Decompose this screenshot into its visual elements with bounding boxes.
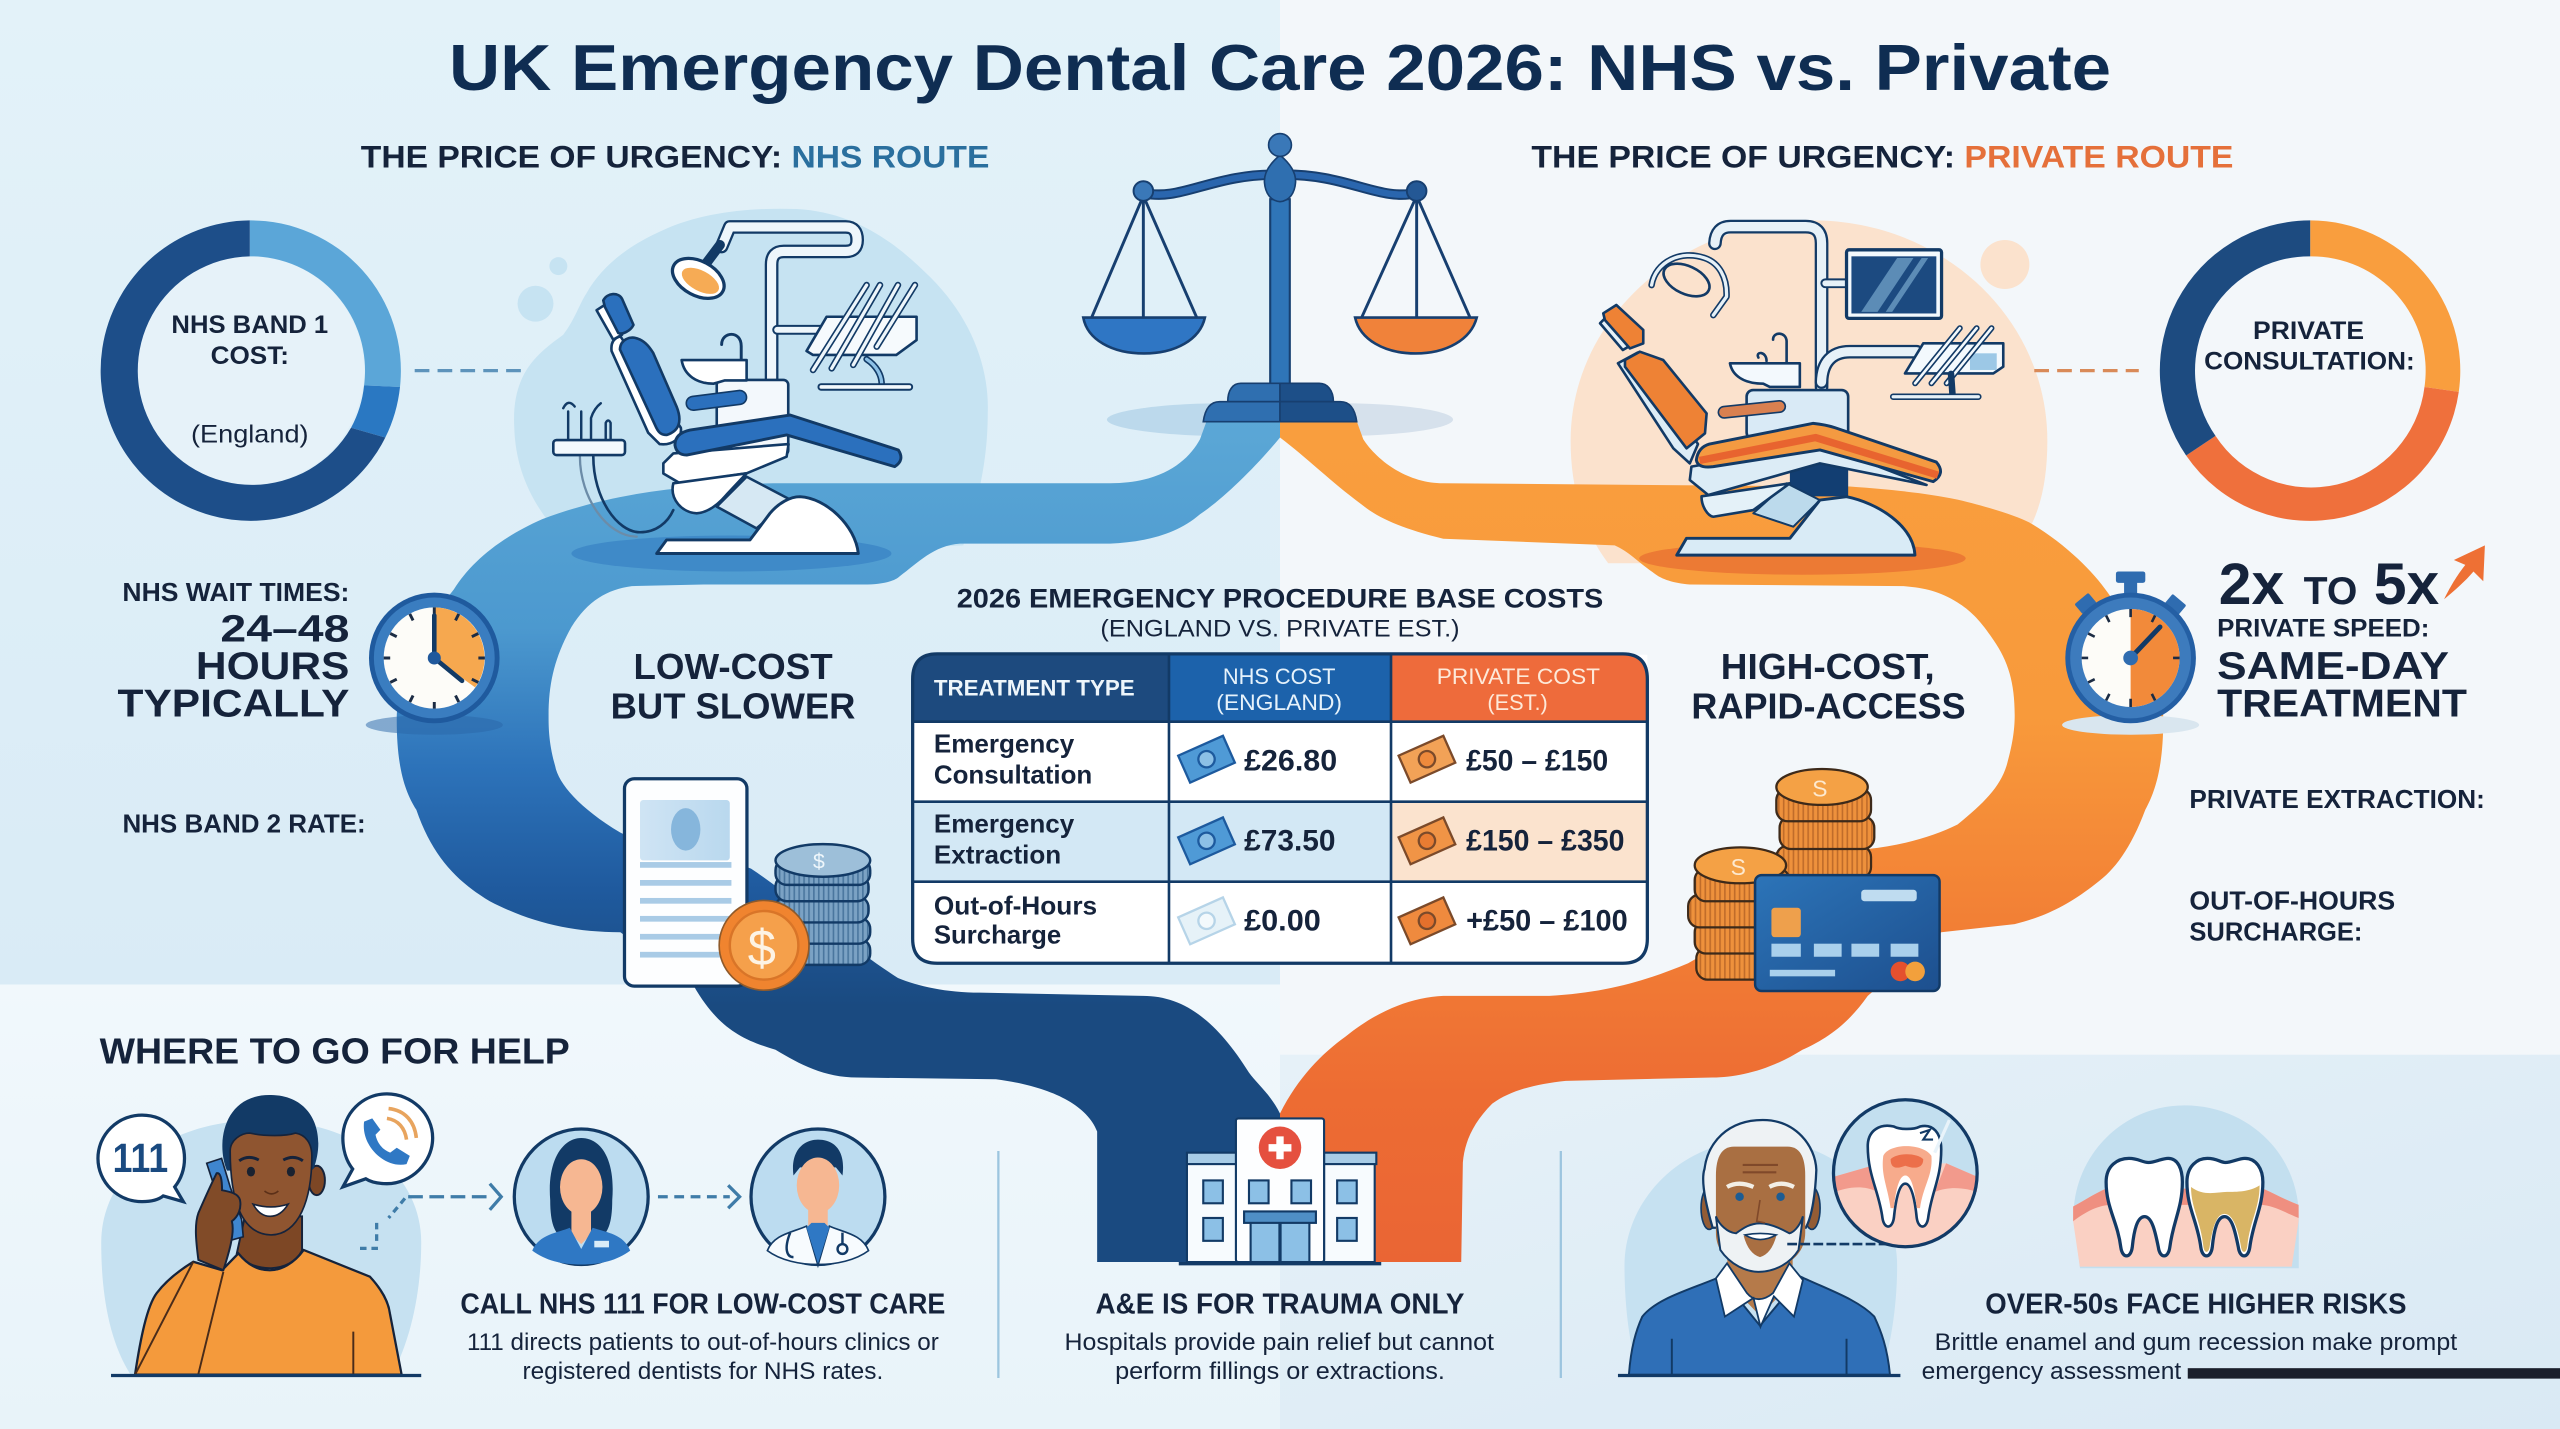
- illustration: older man: [1618, 1120, 1900, 1376]
- private route summary: RAPID-ACCESS: [1691, 685, 1966, 726]
- private extraction label: PRIVATE EXTRACTION:: [2189, 784, 2485, 814]
- pedestal: [1753, 483, 1820, 527]
- beam: [1143, 175, 1417, 195]
- eyes, brows, nose and smile: [239, 1157, 303, 1216]
- header text: TREATMENT TYPE: [934, 676, 1135, 701]
- table heading: [957, 583, 1603, 643]
- hand: [196, 1173, 240, 1270]
- NHS wait unit: HOURS: [196, 645, 349, 688]
- callout: over-50s higher risks: emergency assessment: [1922, 1358, 2181, 1385]
- pillar: [1270, 199, 1290, 384]
- donut: NHS band 1 cost: [101, 220, 401, 521]
- NHS route summary: [611, 646, 856, 726]
- tray: [807, 317, 917, 355]
- base upper step: [1228, 383, 1280, 402]
- arrow: caller to nurse: [360, 1184, 501, 1248]
- icon: hospital: [1179, 1118, 1381, 1264]
- circle outline: [1833, 1100, 1977, 1247]
- callout: A&E for trauma only: A&E IS FOR TRAUMA ONLY: [1096, 1288, 1464, 1320]
- NHS route ribbon: [397, 421, 1280, 1262]
- cost table: Surcharge: [934, 920, 1061, 950]
- icon: treatment document with coins: $: [748, 919, 776, 976]
- NHS route summary: BUT SLOWER: [611, 685, 856, 726]
- under-seat column: [1790, 449, 1848, 496]
- instruments: [1915, 328, 1992, 383]
- icon: coins and credit card: S: [1731, 854, 1746, 880]
- collar: [1716, 1263, 1803, 1327]
- private route summary: [1691, 646, 1966, 726]
- NHS wait value: 24–48: [220, 608, 349, 650]
- donut: private consultation: [2160, 220, 2460, 521]
- base line: [111, 1375, 421, 1377]
- seat body upper: [1690, 444, 1927, 495]
- armrest: [1724, 407, 1780, 412]
- coin stack: [776, 844, 870, 965]
- base line: [1618, 1375, 1900, 1377]
- headrest shell: [1600, 317, 1629, 350]
- hub: [1264, 155, 1296, 202]
- headrest: [1603, 305, 1643, 348]
- tray arm: [1822, 352, 1917, 382]
- speed multiplier: TO: [2304, 570, 2357, 613]
- NHS band 2 label: NHS BAND 2 RATE:: [122, 809, 366, 839]
- icon: speed arrow: [2444, 545, 2485, 599]
- cost table: NHS COST: [1223, 664, 1336, 689]
- monitor stem: [1825, 280, 1847, 286]
- callout: call NHS 111: 111 directs patients to out-of-hours clinics or: [467, 1329, 939, 1356]
- headrest: [603, 294, 633, 333]
- donut label line 2: COST:: [211, 342, 289, 370]
- cost table: (EST.): [1487, 690, 1548, 715]
- seat: [675, 415, 901, 467]
- out-of-hours label: OUT-OF-HOURS: [2189, 885, 2395, 915]
- pulp: [1883, 1146, 1932, 1208]
- cost table: (ENGLAND): [1216, 690, 1342, 715]
- left tooth: [2106, 1158, 2182, 1256]
- NHS money icons: [1178, 736, 1235, 944]
- NHS prices: £26.80: [1244, 745, 1337, 778]
- lamp arm: [1715, 227, 1822, 387]
- credit card: [1755, 875, 1940, 991]
- speed multiplier: 2x: [2219, 552, 2284, 617]
- document: [624, 779, 747, 986]
- speed multiplier: 5x: [2374, 552, 2440, 617]
- icon: private stopwatch: [2062, 571, 2199, 735]
- neck: [237, 1216, 302, 1268]
- lamp: [1658, 257, 1715, 303]
- dashed pointer to tooth: [1787, 1243, 1887, 1245]
- tooth: [1868, 1126, 1941, 1227]
- icon: NHS wait clock: [366, 593, 503, 735]
- crack: [1920, 1130, 1933, 1140]
- callout: call NHS 111: [460, 1288, 945, 1385]
- callout: over-50s higher risks: OVER-50s FACE HIGHER RISKS: [1985, 1288, 2407, 1320]
- front coin stack: [1688, 847, 1791, 980]
- icon: NHS dental chair: [553, 227, 917, 571]
- icon: coins and credit card: [1688, 769, 1940, 991]
- callout: A&E for trauma only: [1064, 1288, 1494, 1385]
- private speed value: SAME-DAY: [2217, 645, 2449, 688]
- blue pan: [1083, 318, 1205, 353]
- icon: doctor: [751, 1129, 885, 1265]
- hand tools: [563, 403, 611, 439]
- base: [1677, 497, 1915, 555]
- base: [657, 497, 858, 553]
- icon: treatment document with coins: $: [813, 851, 825, 874]
- NHS wait qualifier: TYPICALLY: [118, 683, 349, 726]
- callout: call NHS 111: CALL NHS 111 FOR LOW-COST CARE: [460, 1288, 945, 1320]
- face: [1716, 1147, 1805, 1270]
- bubble behind private chair: [1571, 220, 2047, 563]
- private speed label: PRIVATE SPEED:: [2217, 615, 2429, 643]
- column: [717, 380, 788, 455]
- donut label line 3: (England): [191, 420, 309, 448]
- icon: coins and credit card: S: [1812, 776, 1827, 802]
- illustration: caller on phone: [101, 1095, 421, 1376]
- cost table: +£50 – £100: [1466, 905, 1628, 938]
- lamp arm: [722, 227, 857, 382]
- icon: nurse: [514, 1129, 648, 1264]
- cost table: £73.50: [1244, 825, 1336, 858]
- callout: call NHS 111: registered dentists for NHS rates.: [522, 1358, 883, 1385]
- callout: A&E for trauma only: Hospitals provide pain relief but cannot: [1064, 1329, 1494, 1356]
- column: [1747, 390, 1848, 439]
- tray stand: [867, 359, 882, 384]
- callout: A&E for trauma only: perform fillings or extractions.: [1115, 1358, 1445, 1385]
- right tooth: [2187, 1158, 2263, 1256]
- left chains: [1092, 196, 1197, 318]
- seat body lower: [1702, 483, 1790, 517]
- speech bubble: phone: [343, 1094, 433, 1187]
- monitor: [1847, 250, 1942, 318]
- beard: [1716, 1216, 1803, 1272]
- NHS route summary: LOW-COST: [633, 646, 833, 687]
- gum: [1834, 1163, 1977, 1247]
- cost table: £0.00: [1244, 905, 1321, 938]
- cropped text redaction bar: [2188, 1368, 2560, 1379]
- backrest: [620, 338, 679, 435]
- face: [230, 1133, 312, 1235]
- seat: [1696, 423, 1941, 482]
- scale shadow: [1107, 403, 1453, 436]
- ear: [309, 1166, 325, 1195]
- lamp: [705, 245, 720, 264]
- icon: private dental chair: [1600, 227, 2003, 575]
- bubble behind NHS chair: [514, 209, 988, 563]
- armrest: [693, 397, 740, 403]
- cost table: Extraction: [934, 840, 1061, 870]
- instruments: [813, 285, 915, 370]
- table header cells: [913, 655, 1169, 722]
- backrest shell: [1618, 353, 1698, 463]
- seat body lower: [673, 473, 747, 513]
- basin: [682, 360, 747, 384]
- private speed unit: TREATMENT: [2217, 683, 2467, 726]
- private money icons: [1399, 736, 1455, 944]
- donut label: NHS BAND 1: [171, 311, 328, 339]
- icon: balance scale: [1083, 134, 1477, 422]
- pedestal: [717, 477, 790, 528]
- orange pan: [1355, 318, 1477, 353]
- row labels: Emergency: [934, 729, 1075, 759]
- surcharge label: SURCHARGE:: [2189, 916, 2362, 946]
- heading: private route: THE PRICE OF URGENCY: PRIVATE ROUTE: [1531, 139, 2233, 175]
- seat body upper: [663, 444, 789, 483]
- tray stand: [1893, 374, 1978, 397]
- back coin stack: [1776, 769, 1874, 903]
- private route summary: HIGH-COST,: [1721, 646, 1935, 687]
- tray arm: [777, 327, 824, 333]
- sweater: [1629, 1277, 1890, 1375]
- hair: [222, 1095, 318, 1171]
- backrest: [1625, 352, 1707, 448]
- table heading: (ENGLAND VS. PRIVATE EST.): [1100, 616, 1460, 643]
- base lower step: [1203, 402, 1280, 422]
- sleeve and hem seams: [135, 1262, 353, 1375]
- heading: NHS route: THE PRICE OF URGENCY: NHS ROUTE: [361, 139, 989, 175]
- cost table: [913, 654, 1647, 963]
- decay: [2191, 1185, 2260, 1252]
- orange coin: [719, 900, 809, 990]
- cost table: PRIVATE COST: [1437, 664, 1600, 689]
- backrest shell: [611, 336, 681, 444]
- icon: treatment document with coins: [624, 779, 870, 990]
- private route ribbon: [1280, 421, 2163, 1262]
- donut label: PRIVATE: [2253, 317, 2364, 345]
- basin: [1730, 363, 1800, 387]
- title: UK Emergency Dental Care 2026: NHS vs. Private: [449, 31, 2111, 104]
- gum: [2073, 1189, 2299, 1267]
- speech bubble: 111: [98, 1115, 184, 1202]
- icon: tooth cross-section: [1833, 1100, 1977, 1247]
- headrest shell: [597, 305, 622, 340]
- tray: [1905, 343, 2003, 373]
- neck: [1727, 1257, 1793, 1316]
- cost table: Consultation: [934, 760, 1092, 790]
- heading: where to go for help: WHERE TO GO FOR HELP: [100, 1031, 570, 1072]
- instrument holder: [553, 440, 625, 455]
- hair: [1703, 1120, 1816, 1228]
- icon: healthy and damaged teeth: [2073, 1105, 2299, 1268]
- hoses: [580, 457, 637, 537]
- right chains: [1362, 196, 1470, 318]
- callout: over-50s higher risks: Brittle enamel and gum recession make prompt: [1935, 1329, 2457, 1356]
- cost table: £150 – £350: [1466, 825, 1624, 858]
- eyes and brows: [1735, 1192, 1785, 1201]
- ears: [1701, 1187, 1717, 1229]
- table heading: 2026 EMERGENCY PROCEDURE BASE COSTS: [957, 583, 1603, 613]
- callout: over-50s higher risks: [1922, 1288, 2457, 1385]
- phone: [207, 1158, 243, 1240]
- cost table: Out-of-Hours: [934, 890, 1097, 920]
- sweater: [135, 1250, 402, 1375]
- arrow: nurse to doctor: [658, 1185, 740, 1208]
- donut label line 2: CONSULTATION:: [2204, 348, 2415, 376]
- connector: private donut to chair: [2034, 370, 2139, 372]
- speech bubble: 111: 111: [113, 1135, 168, 1181]
- cost table: Emergency: [934, 809, 1075, 839]
- NHS wait label: NHS WAIT TIMES:: [122, 577, 349, 607]
- connector: NHS donut to chair: [415, 370, 526, 372]
- private prices: £50 – £150: [1466, 745, 1608, 778]
